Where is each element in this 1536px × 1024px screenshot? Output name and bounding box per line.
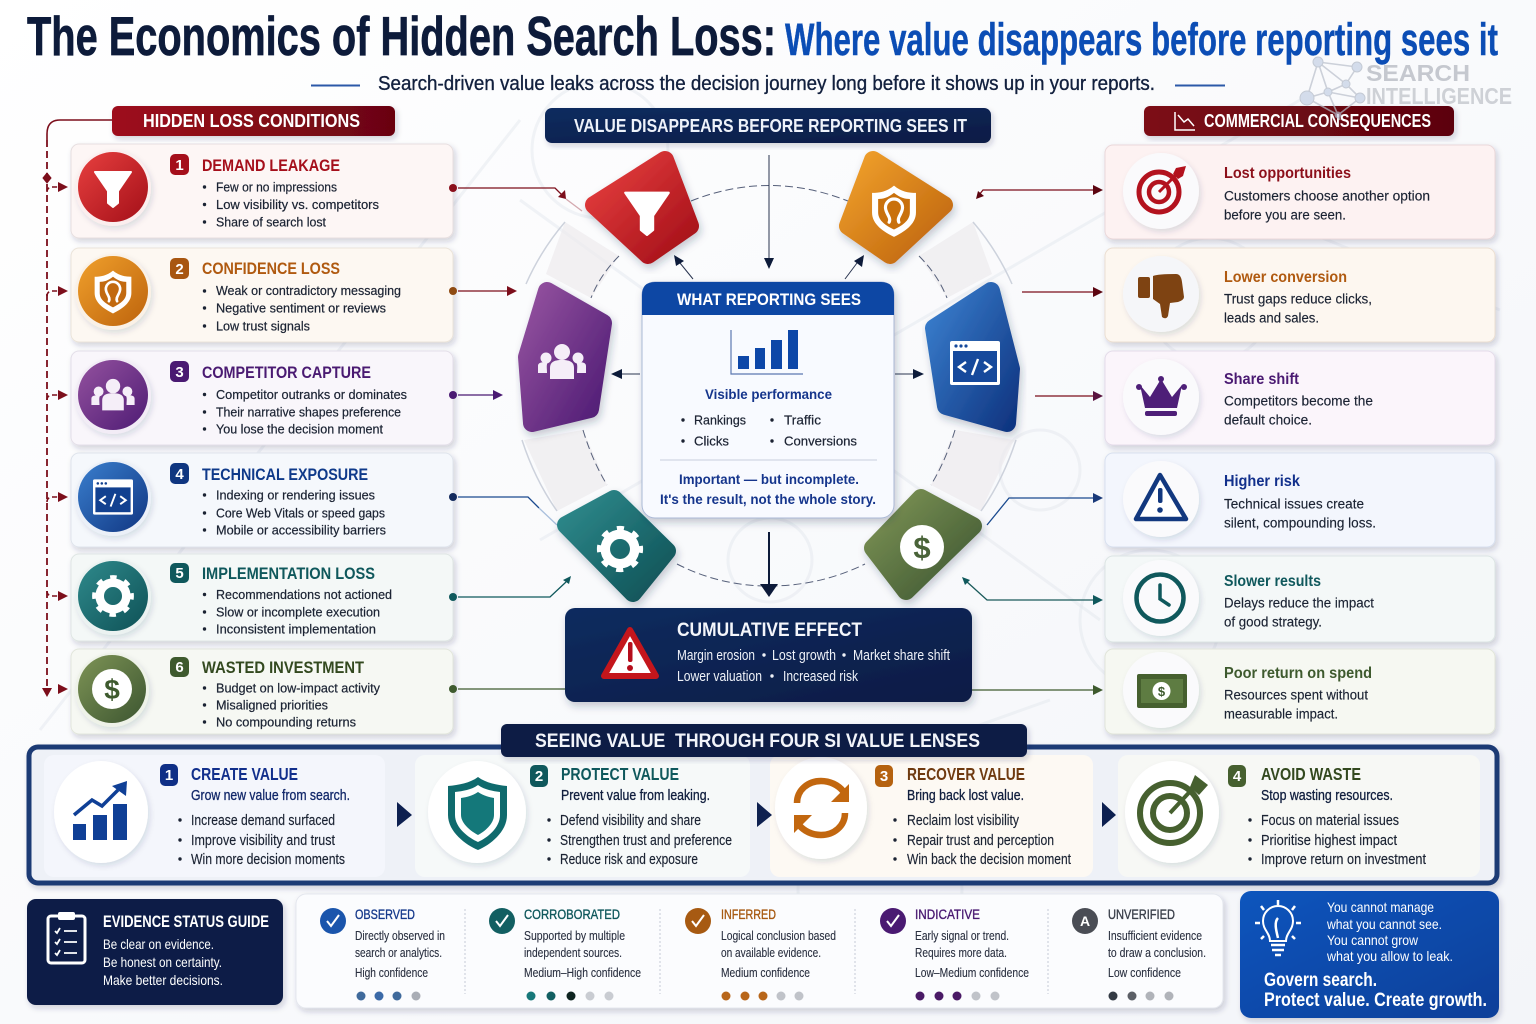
panel: wasted investment: WASTED INVESTMENT xyxy=(202,659,364,677)
icon: declining chart xyxy=(1175,112,1195,130)
lens: avoid waste: 4 xyxy=(1233,768,1242,785)
card: higher risk: silent, compounding loss. xyxy=(1224,516,1376,530)
icon: crown xyxy=(1136,376,1187,416)
panel: demand leakage: DEMAND LEAKAGE xyxy=(202,157,340,175)
panel: technical exposure: Core Web Vitals or speed gaps xyxy=(216,506,385,520)
lens: create value: Improve visibility and trust xyxy=(191,833,335,849)
card: poor return on spend: Resources spent without xyxy=(1224,688,1368,702)
status: observed: search or analytics. xyxy=(355,946,442,960)
callout: govern search: Protect value. Create growth. xyxy=(1264,990,1487,1011)
panel: demand leakage xyxy=(71,144,457,238)
title: The Economics of Hidden Search Loss: xyxy=(27,5,776,67)
panel: cumulative effect xyxy=(565,608,972,702)
segment: teal gear xyxy=(566,499,667,593)
panel: competitor capture: Competitor outranks or dominates xyxy=(216,388,407,402)
status: corroborated xyxy=(489,907,641,1000)
panel: technical exposure: Indexing or rendering issues xyxy=(216,488,375,502)
panel: competitor capture: 3 xyxy=(175,364,184,381)
watermark logo: INTELLIGENCE xyxy=(1366,83,1512,109)
status: unverified: UNVERIFIED xyxy=(1108,907,1175,922)
panel: confidence loss: 2 xyxy=(175,261,184,278)
panel: competitor capture: COMPETITOR CAPTURE xyxy=(202,364,371,382)
callout: govern search: what you allow to leak. xyxy=(1326,948,1453,964)
segment: green dollar xyxy=(873,498,973,591)
status: corroborated: Supported by multiple xyxy=(524,929,625,943)
heading: four value lenses xyxy=(501,724,1027,757)
panel: what reporting sees: Conversions xyxy=(784,434,857,448)
lens: create value xyxy=(44,755,385,877)
loss ring xyxy=(522,186,1016,586)
panel: evidence status guide: Make better decisions. xyxy=(103,972,223,988)
panel: wasted investment: Budget on low-impact activity xyxy=(216,682,381,696)
dashed feedback line xyxy=(42,120,112,697)
panel: implementation loss: 5 xyxy=(175,565,184,582)
card: slower results: of good strategy. xyxy=(1224,614,1322,630)
panel: demand leakage: 1 xyxy=(175,157,184,174)
panel: cumulative effect: Lost growth xyxy=(772,648,836,664)
panel: implementation loss: Slow or incomplete execution xyxy=(216,606,380,620)
segment: blue code xyxy=(934,291,1011,423)
inner arrows xyxy=(611,155,924,379)
status: inferred: INFERRED xyxy=(721,907,776,922)
down arrow xyxy=(760,532,778,597)
icon: bar chart xyxy=(731,330,803,374)
connector arrows right xyxy=(962,185,1103,695)
panel: technical exposure xyxy=(71,453,457,547)
panel: competitor capture: You lose the decision moment xyxy=(216,422,384,436)
lens: create value: 1 xyxy=(165,767,173,784)
status: inferred xyxy=(685,907,836,1000)
lens: recover value: Repair trust and perception xyxy=(907,833,1054,849)
panel: wasted investment: $ xyxy=(104,674,120,705)
heading: commercial consequences xyxy=(1144,106,1454,136)
panel: what reporting sees: Traffic xyxy=(784,414,821,428)
heading: value disappears: VALUE DISAPPEARS BEFORE REPORTING SEES IT xyxy=(574,116,967,136)
lens: protect value: 2 xyxy=(535,768,543,785)
icon: red target xyxy=(1139,166,1186,212)
icon: light bulb xyxy=(1255,900,1301,955)
panel: technical exposure: Mobile or accessibility barriers xyxy=(216,524,386,538)
card: higher risk: Higher risk xyxy=(1224,473,1300,490)
panel: what reporting sees xyxy=(642,282,894,518)
icon: thumbs down xyxy=(1138,274,1184,318)
subtitle: Search-driven value leaks across the decision journey long before it shows up in your reports. xyxy=(378,73,1155,95)
panel: what reporting sees: Visible performance xyxy=(705,387,832,402)
icon: growth chart xyxy=(73,781,127,840)
panel: evidence levels xyxy=(296,894,1223,1008)
card: poor return on spend: measurable impact. xyxy=(1224,706,1338,722)
panel: cumulative effect: Increased risk xyxy=(783,669,859,685)
card: poor return on spend: Poor return on spend xyxy=(1224,665,1372,682)
card: lower conversion: Trust gaps reduce clicks, xyxy=(1224,292,1372,306)
card: lower conversion xyxy=(1105,248,1495,342)
segment: red funnel xyxy=(594,160,690,255)
panel: confidence loss: Weak or contradictory messaging xyxy=(216,284,401,298)
status: unverified: Low confidence xyxy=(1108,966,1181,980)
status: unverified: to draw a conclusion. xyxy=(1108,946,1206,960)
panel: four value lenses xyxy=(29,747,1497,883)
arrows between lenses xyxy=(397,802,1116,827)
lens: create value: CREATE VALUE xyxy=(191,764,298,784)
callout: govern search: Govern search. xyxy=(1264,970,1377,991)
card: lower conversion: leads and sales. xyxy=(1224,310,1319,326)
status: unverified xyxy=(1072,907,1206,1000)
icon: clipboard checklist xyxy=(48,912,85,963)
card: share shift: Competitors become the xyxy=(1224,394,1373,408)
status: corroborated: CORROBORATED xyxy=(524,907,620,922)
status: inferred: Logical conclusion based xyxy=(721,929,836,943)
card: slower results: Slower results xyxy=(1224,573,1321,590)
panel: implementation loss: Inconsistent implementation xyxy=(216,622,376,636)
panel: demand leakage: Share of search lost xyxy=(216,216,327,230)
card: share shift: Share shift xyxy=(1224,371,1299,388)
card: lower conversion: Lower conversion xyxy=(1224,269,1347,286)
panel: implementation loss: IMPLEMENTATION LOSS xyxy=(202,565,375,583)
watermark logo: SEARCH xyxy=(1366,60,1470,86)
status: indicative: Low–Medium confidence xyxy=(915,966,1029,980)
panel: cumulative effect: Market share shift xyxy=(853,648,950,664)
status: inferred: Medium confidence xyxy=(721,966,810,980)
icon: recover arrows xyxy=(794,781,849,835)
icon: warning triangle xyxy=(604,630,656,676)
lens: recover value: Reclaim lost visibility xyxy=(907,813,1020,829)
lens: avoid waste: Improve return on investment xyxy=(1261,852,1426,868)
status: observed: OBSERVED xyxy=(355,907,415,922)
lens: create value: Increase demand surfaced xyxy=(191,813,335,829)
watermark logo xyxy=(1300,57,1512,120)
panel: confidence loss xyxy=(71,248,457,342)
panel: technical exposure: TECHNICAL EXPOSURE xyxy=(202,466,368,484)
status: observed xyxy=(320,907,445,1000)
panel: evidence status guide: Be clear on evidence. xyxy=(103,936,214,952)
status: corroborated: Medium–High confidence xyxy=(524,966,641,980)
callout: govern search: You cannot manage xyxy=(1327,899,1434,915)
card: slower results xyxy=(1105,556,1495,642)
lens: avoid waste: Focus on material issues xyxy=(1261,813,1399,829)
status: indicative: INDICATIVE xyxy=(915,907,980,922)
status: observed: Directly observed in xyxy=(355,929,445,943)
status: inferred: on available evidence. xyxy=(721,946,821,960)
icon: warning triangle xyxy=(1136,475,1186,519)
lens: recover value xyxy=(770,755,1093,877)
icon: teal shield xyxy=(448,777,507,850)
heading: commercial consequences: COMMERCIAL CONSEQUENCES xyxy=(1204,111,1431,131)
panel: technical exposure: 4 xyxy=(175,466,184,483)
status: corroborated: independent sources. xyxy=(524,946,622,960)
card: poor return on spend xyxy=(1105,649,1495,734)
heading: hidden loss conditions: HIDDEN LOSS CONDITIONS xyxy=(143,111,360,131)
panel: cumulative effect: CUMULATIVE EFFECT xyxy=(677,620,862,641)
lens: protect value xyxy=(415,755,750,877)
panel: evidence status guide: EVIDENCE STATUS GUIDE xyxy=(103,912,269,931)
card: share shift: default choice. xyxy=(1224,412,1312,428)
panel: demand leakage: Low visibility vs. competitors xyxy=(216,198,379,212)
panel: wasted investment: Misaligned priorities xyxy=(216,698,328,712)
panel: competitor capture xyxy=(71,351,457,445)
panel: evidence status guide xyxy=(27,899,283,1005)
heading: value disappears xyxy=(545,108,991,143)
status: indicative: Early signal or trend. xyxy=(915,929,1009,943)
status: unverified: A xyxy=(1080,913,1090,929)
lens: protect value: Prevent value from leaking. xyxy=(561,788,710,804)
panel: what reporting sees: Rankings xyxy=(694,414,746,428)
lens: recover value: 3 xyxy=(880,768,888,785)
segment: green dollar: $ xyxy=(913,530,931,565)
panel: evidence status guide: Be honest on certainty. xyxy=(103,954,222,970)
panel: confidence loss: CONFIDENCE LOSS xyxy=(202,260,340,278)
lens: avoid waste: Prioritise highest impact xyxy=(1261,833,1397,849)
panel: cumulative effect: Margin erosion xyxy=(677,648,755,664)
status: unverified: Insufficient evidence xyxy=(1108,929,1202,943)
panel: cumulative effect: Lower valuation xyxy=(677,669,762,685)
lens: protect value: PROTECT VALUE xyxy=(561,764,679,784)
lens: avoid waste xyxy=(1118,755,1480,877)
panel: implementation loss: Recommendations not actioned xyxy=(216,588,392,602)
icon: clock xyxy=(1136,574,1184,622)
lens: recover value: Win back the decision moment xyxy=(907,852,1071,868)
icon: money: $ xyxy=(1158,684,1166,699)
card: higher risk xyxy=(1105,453,1495,547)
panel: wasted investment: No compounding returns xyxy=(216,716,356,730)
lens: create value: Grow new value from search. xyxy=(191,788,350,804)
lens: recover value: RECOVER VALUE xyxy=(907,764,1025,784)
card: slower results: Delays reduce the impact xyxy=(1224,596,1374,610)
callout: govern search: what you cannot see. xyxy=(1326,916,1442,932)
panel: confidence loss: Low trust signals xyxy=(216,320,310,334)
card: lost opportunities: before you are seen. xyxy=(1224,208,1346,222)
lens: recover value: Bring back lost value. xyxy=(907,788,1024,804)
card: lost opportunities: Customers choose another option xyxy=(1224,188,1430,204)
panel: what reporting sees: Important — but incomplete. xyxy=(679,472,859,487)
status: indicative: Requires more data. xyxy=(915,946,1007,960)
status: observed: High confidence xyxy=(355,966,428,980)
card: higher risk: Technical issues create xyxy=(1224,496,1364,512)
card: lost opportunities xyxy=(1105,145,1495,239)
panel: wasted investment xyxy=(71,649,457,734)
panel: wasted investment: 6 xyxy=(175,659,184,676)
icon: money xyxy=(1137,674,1187,708)
panel: demand leakage: Few or no impressions xyxy=(216,180,337,194)
lens: create value: Win more decision moments xyxy=(191,852,345,868)
icon: green target xyxy=(1140,775,1208,843)
status: indicative xyxy=(880,907,1029,1000)
lens: avoid waste: AVOID WASTE xyxy=(1261,764,1361,784)
heading: hidden loss conditions xyxy=(112,106,395,136)
segment: orange shield xyxy=(848,160,944,255)
lens: protect value: Defend visibility and share xyxy=(560,813,701,829)
lens: avoid waste: Stop wasting resources. xyxy=(1261,788,1393,804)
lens: protect value: Strengthen trust and preference xyxy=(560,833,732,849)
lens: protect value: Reduce risk and exposure xyxy=(560,852,698,868)
callout: govern search: You cannot grow xyxy=(1327,932,1419,948)
panel: what reporting sees: It's the result, not the whole story. xyxy=(660,492,876,507)
card: share shift xyxy=(1105,351,1495,445)
connector arrows left xyxy=(458,188,582,689)
panel: what reporting sees: Clicks xyxy=(694,434,729,448)
panel: implementation loss xyxy=(71,554,457,641)
heading: four value lenses: SEEING VALUE THROUGH FOUR SI VALUE LENSES xyxy=(535,730,980,752)
panel: competitor capture: Their narrative shapes preference xyxy=(216,406,401,420)
panel: what reporting sees: WHAT REPORTING SEES xyxy=(677,291,861,309)
callout: govern search xyxy=(1240,891,1499,1018)
segment: purple people xyxy=(527,291,603,423)
card: lost opportunities: Lost opportunities xyxy=(1224,165,1351,182)
panel: confidence loss: Negative sentiment or reviews xyxy=(216,302,386,316)
